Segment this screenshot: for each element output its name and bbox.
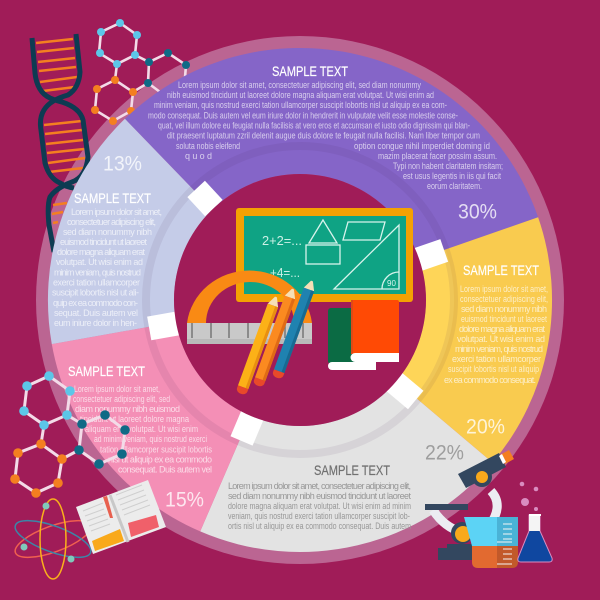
- text block: lavender: euismod tincidunt ut laoreet: [60, 237, 147, 247]
- shapes: [306, 220, 399, 289]
- text block: pink: tincidunt ut laoreet dolore magna: [80, 414, 189, 424]
- panel: gray slice 22%: [200, 381, 492, 552]
- text block: lavender: minim veniam, quis nostrud: [54, 268, 141, 278]
- text block: pink: ad minim veniam, quis nostrud exerci: [94, 434, 207, 444]
- icon: protractor and ruler: [187, 271, 312, 344]
- text block: yellow: euismod tincidunt ut laoreet: [461, 314, 547, 324]
- text block: yellow: volutpat. Ut wisi enim ad: [457, 334, 545, 344]
- heading: lavender: SAMPLE TEXT: [74, 190, 151, 206]
- text block: yellow: minim veniam, quis nostrud: [455, 344, 543, 354]
- panel: pink slice 15%: [52, 322, 250, 531]
- text block: lavender: quip ex ea commodo con-: [53, 298, 138, 308]
- heading: gray: SAMPLE TEXT: [314, 462, 390, 478]
- text block: pink: Lorem ipsum dolor sit amet,: [74, 384, 160, 394]
- text block: purple: soluta nobis eleifend: [176, 141, 240, 151]
- text block: purple: est usus legentis in iis qui facit: [403, 171, 501, 181]
- text block: pink: consequat. Duis autem vel: [118, 464, 212, 474]
- text block: yellow: ex ea commodo consequat.: [444, 375, 536, 385]
- text block: purple: [148, 80, 503, 191]
- text block: lavender: [52, 207, 162, 328]
- text block: lavender: dolore magna aliquam erat: [57, 247, 145, 257]
- slice divider markers: [147, 181, 448, 446]
- icon: upper molecule: [91, 19, 190, 125]
- text block: purple: option congue nihil imperdiet doming id: [354, 141, 490, 151]
- text block: gray: [228, 481, 411, 531]
- percentage: 13%: 13%: [103, 152, 142, 176]
- inner shaded band: [146, 146, 454, 454]
- panel: lavender slice 13%: [48, 119, 212, 344]
- equations: 2+2=...: [262, 233, 302, 248]
- icon: books: [328, 300, 399, 370]
- heading: yellow: SAMPLE TEXT: [463, 262, 539, 278]
- equations: [262, 233, 302, 280]
- text block: gray: dolore magna aliquam erat volutpat. Ut wisi enim ad minim: [228, 501, 411, 511]
- text block: purple: nibh euismod tincidunt ut laoreet dolore magna aliquam erat volutpat. Ut wisi enim ad: [167, 90, 434, 100]
- text block: lavender: Lorem ipsum dolor sit amet,: [71, 207, 162, 217]
- text block: yellow: dolore magna aliquam erat: [459, 324, 545, 334]
- text block: pink: [73, 384, 212, 474]
- text block: purple: mazim placerat facer possim assum.: [378, 151, 497, 161]
- text block: pink: tation ullamcorper suscipit lobortis: [100, 444, 212, 454]
- heading: purple: SAMPLE TEXT: [272, 63, 348, 79]
- panel: purple slice 30%: [125, 48, 538, 259]
- text block: lavender: suscipit lobortis nisl ut ali-: [52, 288, 139, 298]
- text block: gray: veniam, quis nostrud exerci tation ullamcorper suscipit lob-: [228, 511, 410, 521]
- text block: yellow: consectetuer adipiscing elit,: [460, 294, 548, 304]
- text block: purple: quat, vel illum dolore eu feugiat nulla facilisis at vero eros et accumsan et iusto odio dignissim qui blan-: [158, 120, 470, 130]
- label: 90: 90: [387, 279, 396, 288]
- equations: +4=...: [270, 265, 300, 280]
- text block: lavender: eum iniure dolor in hen-: [54, 318, 137, 328]
- icon: DNA helix: [32, 34, 88, 252]
- text block: purple: eorum claritatem.: [427, 181, 482, 191]
- percentage: 30%: 30%: [458, 200, 497, 224]
- text block: purple: Typi non habent claritatem insitam;: [393, 161, 503, 171]
- text block: gray: sed diam nonummy nibh euismod tincidunt ut laoreet: [228, 491, 411, 501]
- panel: yellow slice 20%: [396, 217, 552, 463]
- text block: yellow: exerci tation ullamcorper: [452, 354, 541, 364]
- text block: lavender: sed diam nonummy nibh: [63, 227, 152, 237]
- text block: yellow: suscipit lobortis nisl ut aliquip: [448, 364, 539, 374]
- text block: lavender: consectetuer adipiscing elit,: [67, 217, 156, 227]
- text block: lavender: exerci tation ullamcorper: [53, 278, 140, 288]
- icon: flask: [518, 482, 552, 562]
- text block: pink: diam nonummy nibh euismod: [75, 404, 180, 414]
- text block: yellow: [444, 284, 548, 385]
- center hole: [174, 174, 426, 426]
- icon: beaker: [464, 517, 518, 568]
- icon: microscope: [425, 450, 514, 560]
- text block: gray: Lorem ipsum dolor sit amet, consectetuer adipiscing elit,: [228, 481, 411, 491]
- text block: yellow: Lorem ipsum dolor sit amet,: [460, 284, 548, 294]
- text block: purple: modo consequat. Duis autem vel eum iriure dolor in hendrerit in vulputate velit esse molestie conse-: [148, 110, 458, 120]
- percentage: 15%: 15%: [165, 488, 204, 512]
- text block: purple: dit praesent luptatum zzril delenit augue duis dolore te feugait nulla facilisi. Nam liber tempor cum: [167, 130, 480, 140]
- text block: pink: aliquam erat volutpat. Ut wisi enim: [85, 424, 198, 434]
- icon: open book: [76, 480, 166, 554]
- text block: pink: nisl ut aliquip ex ea commodo: [108, 454, 212, 464]
- percentage: 20%: 20%: [466, 416, 505, 438]
- text block: purple: q u o d: [185, 151, 212, 161]
- icon: pencils: [236, 279, 317, 396]
- icon: atom: [11, 499, 95, 579]
- icon: blackboard: [236, 208, 413, 302]
- text block: purple: Lorem ipsum dolor sit amet, consectetuer adipiscing elit, sed diam nonummy: [178, 80, 421, 90]
- text block: lavender: sequat. Duis autem vel: [54, 308, 138, 318]
- text block: purple: minim veniam, quis nostrud exerci tation ullamcorper suscipit lobortis nisl ut aliquip ex ea com-: [154, 100, 447, 110]
- text block: lavender: volutpat. Ut wisi enim ad: [56, 257, 143, 267]
- text block: yellow: sed diam nonummy nibh: [461, 304, 547, 314]
- outer ring: [36, 36, 564, 564]
- percentage: 22%: 22%: [425, 442, 464, 464]
- text block: pink: consectetuer adipiscing elit, sed: [73, 394, 170, 404]
- icon: lower molecule: [10, 371, 130, 498]
- heading: pink: SAMPLE TEXT: [68, 363, 145, 379]
- text block: gray: ortis nisl ut aliquip ex ea commodo consequat. Duis autem: [228, 521, 411, 531]
